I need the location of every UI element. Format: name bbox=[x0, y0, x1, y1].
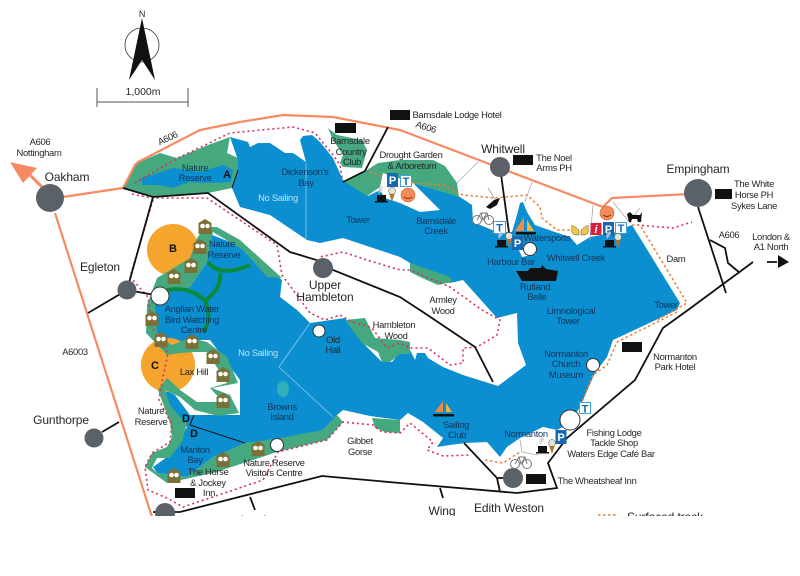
Hambleton Wood bbox=[345, 318, 410, 362]
place labels on land: Armley bbox=[429, 294, 457, 305]
place labels on land: Drought Garden bbox=[379, 149, 443, 160]
facility icons: Normanton: P bbox=[557, 432, 565, 444]
white cropped area below map bbox=[0, 516, 800, 576]
section letters: C bbox=[151, 360, 159, 372]
lake: Rutland Water bbox=[153, 135, 680, 477]
place labels on land: Hall bbox=[326, 344, 341, 355]
grey access lines bbox=[457, 162, 640, 455]
town labels: Gunthorpe bbox=[33, 413, 89, 427]
facility icons: arboretum bbox=[375, 173, 415, 202]
Browns Island bbox=[277, 381, 289, 397]
Gibbet Gorse woodland bbox=[372, 418, 400, 433]
place labels on land: Fishing Lodge bbox=[586, 427, 642, 438]
place labels on land: Old bbox=[326, 334, 340, 345]
bird sanctuary green barriers bbox=[167, 262, 250, 332]
place labels on land: Nature Reserve bbox=[243, 457, 305, 468]
surfaced tracks, orange dotted bbox=[370, 172, 687, 463]
place labels on water: Bay bbox=[187, 454, 203, 465]
Drought Garden and Arboretum bbox=[345, 160, 459, 197]
place labels on water: Harbour Bar bbox=[487, 256, 535, 267]
place labels on land: The Wheatsheaf Inn bbox=[557, 475, 637, 486]
place labels on water: Tower bbox=[654, 299, 678, 310]
place labels on land: Lax Hill bbox=[180, 366, 208, 377]
place labels on land: Country bbox=[336, 146, 367, 157]
place labels on land: Arms PH bbox=[536, 162, 572, 173]
arrow to London bbox=[767, 255, 789, 268]
place labels on water: Bay bbox=[298, 177, 314, 188]
sailing boat icon: watersports bbox=[515, 217, 536, 234]
place labels on water: Tower bbox=[346, 214, 370, 225]
legend dash bbox=[598, 514, 618, 516]
place labels on land: Wood bbox=[384, 330, 408, 341]
place labels on land: The White bbox=[734, 178, 774, 189]
place labels on land: Nature bbox=[138, 405, 164, 416]
place labels on water: Centre bbox=[181, 324, 207, 335]
place labels on land: & Arboretum bbox=[388, 160, 437, 171]
dog icon bbox=[627, 212, 642, 222]
place labels on water: Island bbox=[270, 411, 294, 422]
place labels on water: Dickenson's bbox=[282, 166, 329, 177]
facility icons: Whitwell harbour: T bbox=[496, 222, 503, 234]
place labels on water: Nature bbox=[209, 238, 235, 249]
town labels: Surfaced track bbox=[627, 510, 704, 524]
facility icons: arboretum: P bbox=[389, 175, 396, 187]
place labels on land: Gibbet bbox=[347, 435, 374, 446]
ship icon: Rutland Belle bbox=[516, 265, 558, 281]
town labels: Whitwell bbox=[481, 142, 525, 156]
Barnsdale Country Club woodland bbox=[328, 128, 367, 168]
road labels: A606 bbox=[156, 128, 179, 147]
place labels on water: Sailing bbox=[443, 419, 469, 430]
white location circles bbox=[151, 242, 600, 452]
town labels: Hambleton bbox=[296, 290, 354, 304]
place labels on land: Waters Edge Café Bar bbox=[567, 448, 655, 459]
sailing boat icon: Sailing Club bbox=[433, 401, 454, 416]
road labels bbox=[17, 118, 791, 357]
place labels on water: Club bbox=[448, 429, 466, 440]
lake white patches bbox=[180, 246, 536, 402]
town labels: Edith Weston bbox=[474, 501, 544, 515]
place labels on land: Sykes Lane bbox=[731, 200, 777, 211]
place labels on land: Gorse bbox=[348, 446, 372, 457]
town labels: Upper bbox=[309, 278, 341, 292]
place labels on land: The Noel bbox=[536, 152, 572, 163]
section letters: D bbox=[182, 413, 190, 425]
place labels on land: Inn bbox=[203, 487, 215, 498]
road labels: A606 bbox=[719, 229, 739, 240]
place labels on water: Creek bbox=[424, 225, 448, 236]
facility icons: arboretum: T bbox=[403, 176, 410, 188]
road labels: A606 bbox=[30, 136, 50, 147]
bird hide icons bbox=[146, 219, 264, 483]
place labels on water: Limnological bbox=[547, 305, 595, 316]
road labels: Nottingham bbox=[17, 147, 62, 158]
road labels: A1 North bbox=[754, 241, 788, 252]
facility icons: Whitwell Creek: P bbox=[605, 224, 612, 236]
road labels: London & bbox=[752, 231, 791, 242]
place labels on land: Park Hotel bbox=[655, 361, 696, 372]
section letters bbox=[151, 169, 231, 440]
facility icons: Whitwell harbour bbox=[472, 188, 523, 250]
facility icons: Normanton: T bbox=[582, 404, 589, 416]
place labels on land bbox=[135, 109, 777, 498]
town labels: Egleton bbox=[80, 260, 120, 274]
place labels on land: Hambleton bbox=[373, 319, 415, 330]
place labels on water: Browns bbox=[267, 401, 297, 412]
village circles bbox=[36, 157, 712, 523]
town labels: Empingham bbox=[666, 162, 730, 176]
town labels: Oakham bbox=[45, 170, 89, 184]
place labels on water: Normanton bbox=[504, 428, 548, 439]
facility icons: Whitwell Creek bbox=[572, 206, 626, 248]
black minor roads bbox=[88, 127, 753, 512]
north arrow and compass: N bbox=[139, 9, 145, 19]
orange area C bbox=[141, 338, 195, 392]
place labels on land: & Jockey bbox=[190, 477, 226, 488]
section letters: B bbox=[169, 243, 177, 255]
place labels on water: Reserve bbox=[208, 249, 240, 260]
facility icons: Normanton bbox=[510, 402, 590, 468]
orange area B bbox=[147, 224, 199, 276]
place labels on water: Belle bbox=[527, 291, 547, 302]
place labels on water: No Sailing bbox=[258, 192, 298, 203]
place labels on water: Tower bbox=[556, 315, 580, 326]
place labels on water: Church bbox=[552, 358, 580, 369]
place labels on water: Anglian Water bbox=[165, 303, 219, 314]
place labels on water: Museum bbox=[549, 369, 584, 380]
town labels: Lyndon bbox=[241, 513, 279, 527]
place labels on land: Club bbox=[343, 156, 361, 167]
Armley Wood bbox=[410, 263, 452, 285]
black pub and hotel markers bbox=[175, 110, 732, 498]
scale bar: 1,000m bbox=[125, 86, 161, 98]
place labels on land: Dam bbox=[667, 253, 686, 264]
facility icons: Whitwell Creek: i bbox=[594, 224, 598, 236]
place labels on water: Manton bbox=[180, 444, 210, 455]
place labels on land: Normanton bbox=[653, 351, 697, 362]
section letters: D bbox=[190, 428, 198, 440]
place labels on water: Bird Watching bbox=[165, 314, 219, 325]
orange A roads bbox=[55, 115, 690, 517]
town labels bbox=[33, 142, 730, 527]
north arrow and compass bbox=[125, 9, 159, 80]
place labels on water: Reserve bbox=[179, 172, 211, 183]
place labels on land: Wood bbox=[431, 305, 455, 316]
place labels on land: Visitors Centre bbox=[246, 467, 302, 478]
place labels on land: Barnsdale bbox=[330, 135, 370, 146]
green nature reserves bbox=[123, 128, 459, 483]
western nature reserve band bbox=[145, 227, 343, 483]
place labels on land: Tackle Shop bbox=[590, 437, 638, 448]
nature reserve A pool bbox=[142, 165, 233, 188]
road labels: A606 bbox=[415, 118, 438, 135]
section letters: A bbox=[223, 169, 231, 181]
place labels on water: Nature bbox=[182, 162, 208, 173]
place labels on water: Whitwell Creek bbox=[547, 252, 606, 263]
footpaths, magenta dotted bbox=[130, 127, 692, 507]
place labels on water: Normanton bbox=[544, 348, 588, 359]
facility icons: Whitwell harbour: P bbox=[514, 238, 521, 250]
place labels on land: Reserve bbox=[135, 416, 167, 427]
town labels: Wing bbox=[429, 504, 455, 518]
nature reserve A bbox=[123, 137, 238, 197]
place labels on water: Barnsdale bbox=[416, 215, 456, 226]
arrow to Nottingham bbox=[10, 162, 42, 187]
place labels on land: Barnsdale Lodge Hotel bbox=[412, 109, 502, 120]
no sailing boundaries bbox=[279, 163, 333, 417]
place labels on land: The Horse bbox=[187, 466, 229, 477]
A section dam line bbox=[190, 170, 245, 443]
place labels on water: Watersports bbox=[524, 232, 571, 243]
place labels on water bbox=[165, 162, 678, 465]
road labels: A6003 bbox=[62, 346, 88, 357]
place labels on land: Horse PH bbox=[735, 189, 773, 200]
place labels on water: Rutland bbox=[520, 281, 550, 292]
facility icons: Whitwell Creek: T bbox=[618, 223, 625, 235]
place labels on water: No Sailing bbox=[238, 347, 278, 358]
scale bar bbox=[97, 86, 188, 107]
